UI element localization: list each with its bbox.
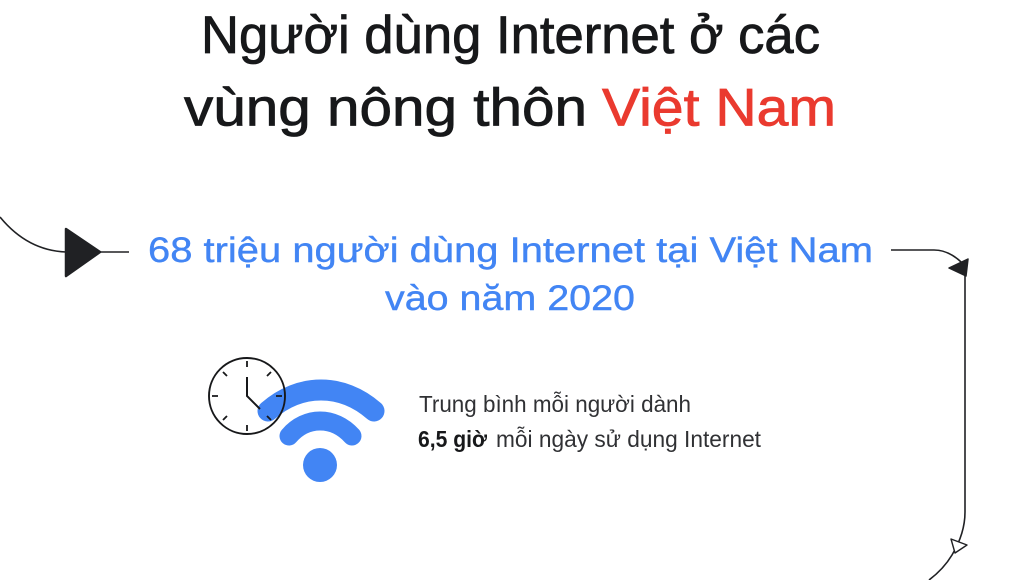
title: Việt Nam xyxy=(602,78,836,138)
heading: 68 million internet users: 68 triệu người dùng Internet tại Việt Nam xyxy=(148,230,873,270)
icon: wifi xyxy=(268,390,374,482)
text: daily usage: 6,5 giờ xyxy=(418,426,488,452)
title: Người dùng Internet ở các xyxy=(201,6,820,65)
arrow: left connector with black triangle xyxy=(0,217,129,276)
text: daily usage: Trung bình mỗi người dành xyxy=(419,391,691,417)
title: vùng nông thôn xyxy=(184,78,587,138)
text: daily usage xyxy=(418,391,762,452)
icon: clock xyxy=(209,358,285,434)
heading: 68 million internet users xyxy=(148,230,873,318)
heading: 68 million internet users: vào năm 2020 xyxy=(385,278,635,318)
arrow: right connector with triangles xyxy=(891,250,968,580)
text: daily usage: mỗi ngày sử dụng Internet xyxy=(496,426,762,452)
title xyxy=(184,6,836,138)
